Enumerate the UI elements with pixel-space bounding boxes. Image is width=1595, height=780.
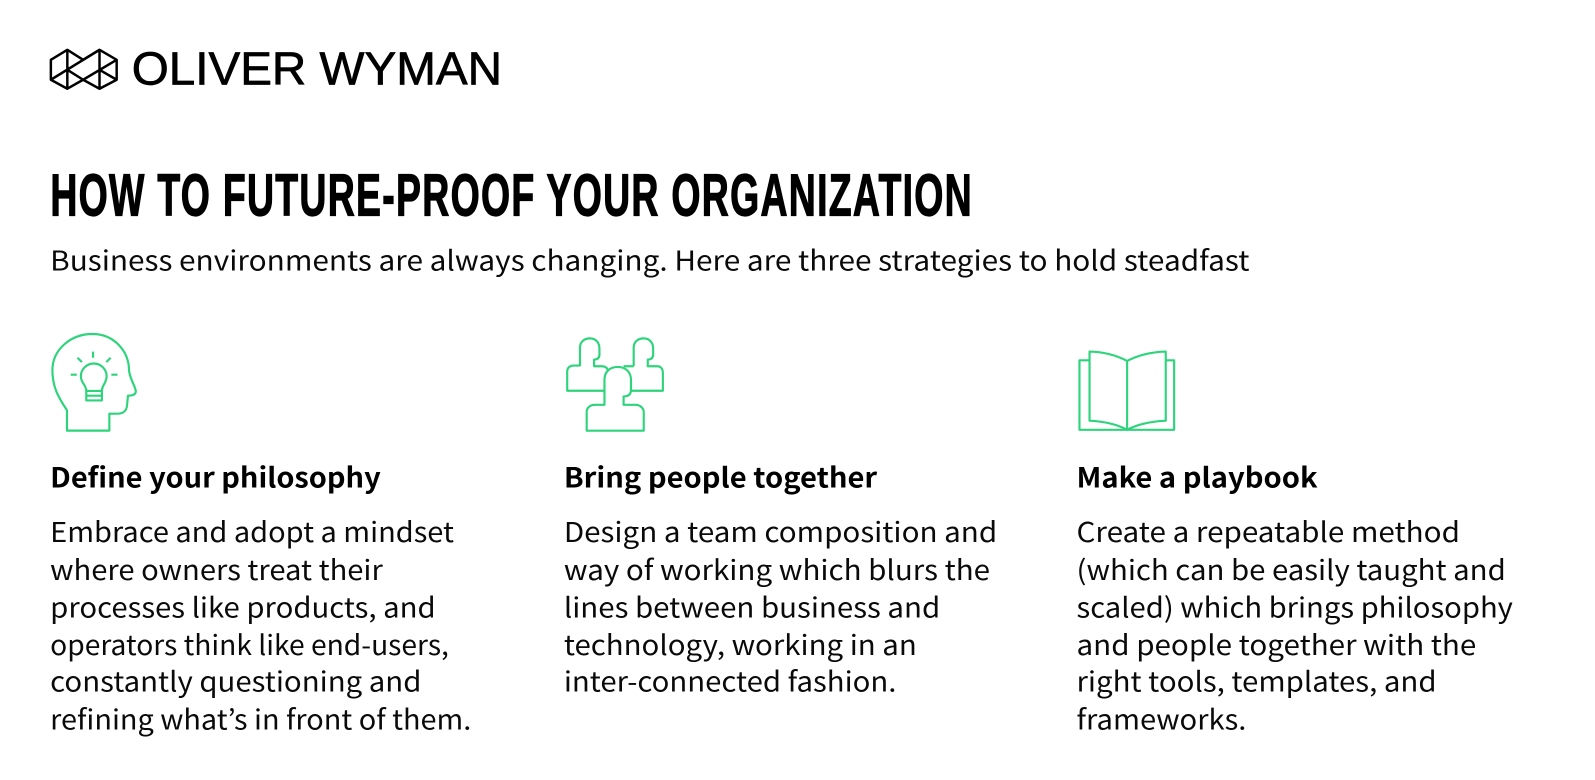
icon: logo mark (51, 50, 117, 89)
body text: and people together with the (1077, 623, 1476, 663)
body text: refining what’s in front of them. (50, 697, 471, 737)
body text: technology, working in an (564, 623, 917, 663)
panel: make a playbook (1077, 352, 1513, 737)
body text (1077, 510, 1513, 737)
heading: Make a playbook (1077, 456, 1318, 496)
logo wordmark: OLIVER WYMAN (132, 42, 502, 94)
icon: three people (567, 338, 663, 431)
body text: processes like products, and (50, 585, 436, 625)
body text: way of working which blurs the (564, 548, 990, 588)
heading: Bring people together (564, 456, 877, 496)
panel: bring people together (564, 338, 997, 700)
icon: open book (1079, 352, 1174, 430)
body text: scaled) which brings philosophy (1077, 585, 1513, 625)
body text: constantly questioning and (50, 660, 421, 700)
body text: Embrace and adopt a mindset (50, 510, 454, 550)
body text: Create a repeatable method (1077, 510, 1460, 550)
subtitle: Business environments are always changing. Here are three strategies to hold steadfast (50, 239, 1249, 279)
body text: operators think like end-users, (50, 623, 449, 663)
icon: head with light bulb (52, 334, 136, 431)
body text: where owners treat their (50, 548, 383, 588)
body text (50, 510, 471, 737)
panel: define your philosophy (50, 334, 471, 737)
body text: (which can be easily taught and (1077, 548, 1506, 588)
body text: right tools, templates, and (1077, 660, 1437, 700)
heading: Define your philosophy (50, 456, 381, 496)
body text: lines between business and (564, 585, 940, 625)
title: HOW TO FUTURE-PROOF YOUR ORGANIZATION (50, 163, 973, 229)
body text: frameworks. (1077, 697, 1246, 737)
logo: Oliver Wyman (51, 42, 502, 94)
body text: Design a team composition and (564, 510, 997, 550)
body text: inter-connected fashion. (564, 660, 896, 700)
body text (564, 510, 997, 700)
